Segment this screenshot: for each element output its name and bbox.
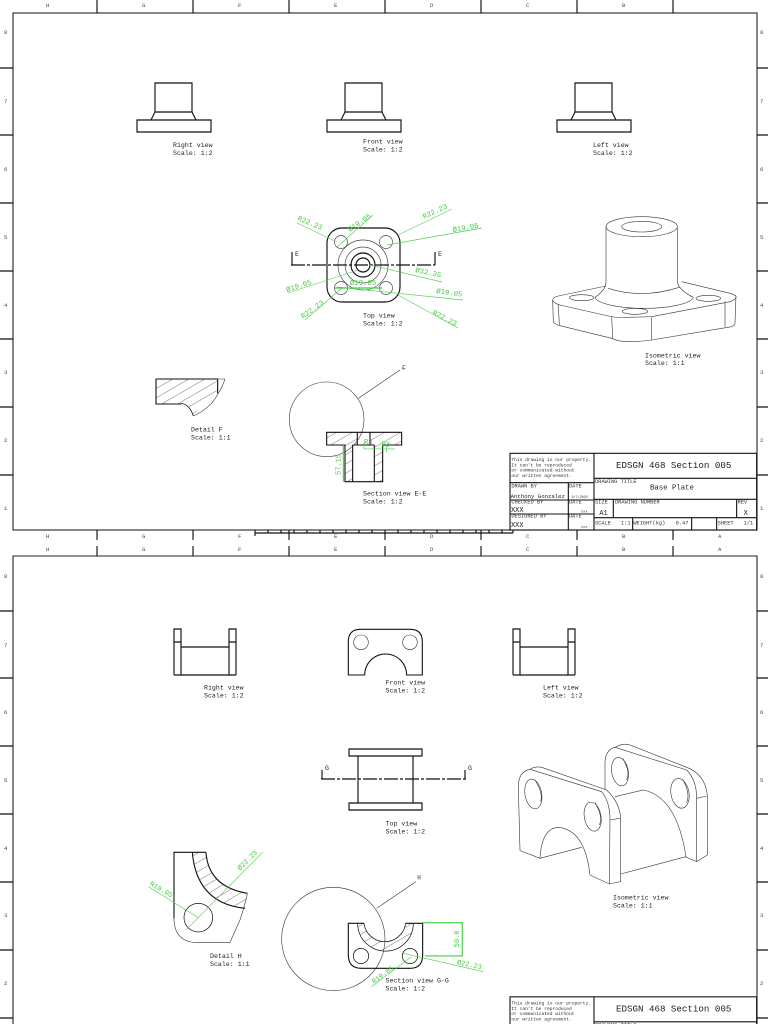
panel: sheet 1 drawing frame: 3 [4,369,7,376]
detail H: Ø22.23 [236,849,260,873]
section view E-E with detail circle: R3 [364,439,372,447]
front view of bracket [348,629,425,694]
title block: sheet 2: This drawing is our property. [511,1000,591,1006]
panel: sheet 1 drawing frame: B [622,533,626,540]
panel: sheet 2 drawing frame: D [430,546,434,553]
panel: sheet 1 drawing frame: 7 [4,98,7,105]
section view G-G with detail circle [282,875,483,992]
right view of bracket: Right view [204,684,244,692]
top view of base plate with dimensions: Ø32.35 [414,266,442,280]
detail H: Scale: 1:1 [210,961,250,968]
panel: sheet 1 drawing frame: 5 [4,234,7,241]
panel: sheet 2 drawing frame: 7 [760,642,763,649]
title block: sheet 1: This drawing is our property. [511,457,591,463]
title block: sheet 1: REV [738,500,748,506]
detail H: R19.05 [148,881,174,900]
title block: sheet 1: DATE [569,484,582,490]
panel: sheet 1 drawing frame: C [526,2,530,9]
detail F [156,379,231,442]
top view of base plate with dimensions: R22.23 [300,300,326,321]
top view of bracket: G [468,765,472,772]
panel: sheet 1 drawing frame: 1 [760,505,764,512]
panel: sheet 1 drawing frame: E [334,533,338,540]
panel: sheet 2 drawing frame: 6 [760,709,763,716]
title block: sheet 1: CHECKED BY [511,500,544,506]
panel: sheet 2 drawing frame: 4 [760,845,764,852]
top view of bracket: G [325,765,329,772]
title block: sheet 1: 9/7/2020 [572,495,588,499]
panel: sheet 1 drawing frame: 7 [760,98,763,105]
panel: sheet 2 drawing frame: E [334,546,338,553]
title block: sheet 1: DRAWN BY [511,484,538,490]
title block: sheet 1: our written agreement. [511,473,572,479]
title block: sheet 1: SHEET [718,520,734,526]
right view of bracket: Scale: 1:2 [204,692,244,700]
panel: sheet 2 drawing frame: 8 [4,573,7,580]
section view E-E with detail circle [289,365,426,506]
title block: sheet 2: EDSGN 468 Section 005 [616,1003,731,1014]
panel: sheet 1 drawing frame: H [46,533,49,540]
title block: sheet 1: or communicated without [511,468,575,474]
panel: sheet 2 drawing frame: C [526,546,530,553]
panel: sheet 1 drawing frame: F [238,533,241,540]
panel: sheet 2 drawing frame: 2 [760,980,763,987]
panel: sheet 1 drawing frame: A [718,533,722,540]
title block: sheet 1: XXX [511,522,524,530]
title block: sheet 1: DRAWING TITLE [595,479,637,485]
title block: sheet 1: xxx [581,511,588,515]
panel: sheet 1 drawing frame: 3 [760,369,763,376]
section view G-G with detail circle: Section view G-G [386,978,449,984]
title block: sheet 2 [510,997,757,1024]
top view of base plate with dimensions: Ø19.05 [436,287,463,300]
isometric view of base plate [553,217,736,367]
panel: sheet 2 drawing frame: G [142,546,146,553]
top view of bracket [321,749,472,836]
panel: sheet 2 drawing frame: 3 [4,912,7,919]
detail F: Scale: 1:1 [191,434,231,442]
section view G-G with detail circle: Ø22.23 [456,958,482,972]
title block: sheet 1: 1:1 [621,520,631,526]
section view E-E with detail circle: F [402,365,406,372]
left view of bracket [513,629,583,700]
panel: sheet 1 drawing frame: 4 [4,302,8,309]
panel: sheet 2 drawing frame: 5 [760,777,763,784]
title block: sheet 2: It can't be reproduced [511,1006,572,1012]
panel: sheet 1 drawing frame: H [46,2,49,9]
top view of bracket: Scale: 1:2 [386,828,425,836]
top view of base plate with dimensions: Scale: 1:2 [363,320,403,328]
panel: sheet 1 drawing frame: 6 [4,166,7,173]
panel: sheet 2 drawing frame: 3 [760,912,763,919]
top view of base plate with dimensions [285,203,482,329]
panel: sheet 1 drawing frame: E [334,2,338,9]
title block: sheet 2: or communicated without [511,1011,575,1017]
panel: sheet 2 drawing frame: 7 [4,642,7,649]
panel: sheet 1 drawing frame: 8 [4,29,7,36]
top view of base plate with dimensions: R22.23 [296,215,323,233]
top view of base plate with dimensions: Ø19.05 [452,222,479,235]
detail H: Detail H [210,953,242,960]
isometric view of bracket: Isometric view [613,894,668,902]
panel: sheet 1 drawing frame: C [526,533,530,540]
panel: sheet 2 drawing frame: H [46,546,49,553]
top view of bracket: Top view [386,820,417,828]
title block: sheet 1 [510,453,765,530]
title block: sheet 1: Base Plate [650,485,694,493]
top view of base plate with dimensions: Ø19.05 [350,279,376,288]
title block: sheet 1: DATE [569,500,582,506]
right view of base plate: Right view [173,142,213,149]
top view of base plate with dimensions: E [295,251,299,258]
panel: sheet 2 drawing frame: 2 [4,980,7,987]
panel: sheet 2 drawing frame: F [238,546,241,553]
panel: sheet 1 drawing frame: 2 [760,437,763,444]
title block: sheet 1: EDSGN 468 Section 005 [616,460,731,471]
panel: sheet 2 drawing frame: 4 [4,845,8,852]
title block: sheet 1: DRAWING NUMBER [615,500,661,506]
isometric view of bracket [518,744,707,910]
top view of base plate with dimensions: E [438,251,442,258]
right view of base plate: Scale: 1:2 [173,150,213,157]
panel: sheet 2 drawing frame: B [622,546,626,553]
title block: sheet 1: 0.47 [676,520,688,526]
top view of base plate with dimensions: Ø19.05 [285,278,313,295]
title block: sheet 1: It can't be reproduced [511,462,572,468]
panel: sheet 1 drawing frame: D [430,2,434,9]
top view of base plate with dimensions: R22.23 [431,310,458,329]
left view of bracket: Left view [543,684,579,692]
front view of bracket: Front view [386,680,425,686]
isometric view of base plate: Scale: 1:1 [645,360,685,367]
left view of base plate [557,83,633,157]
left view of base plate: Scale: 1:2 [593,150,633,157]
title block: sheet 1: Anthony Gonzalez [511,493,565,500]
panel: sheet 2 drawing frame: 8 [760,573,763,580]
detail H [148,849,263,968]
panel: sheet 1 drawing frame [0,0,768,540]
panel: sheet 1 drawing frame: 6 [760,166,763,173]
right view of base plate [137,83,213,157]
panel: sheet 1 drawing frame: F [238,2,241,9]
panel: sheet 1 drawing frame: G [142,533,146,540]
left view of bracket: Scale: 1:2 [543,692,583,700]
title block: sheet 1: A1 [599,510,608,518]
panel: sheet 1 drawing frame: 2 [4,437,7,444]
section view G-G with detail circle: H [417,875,421,882]
panel: sheet 1 drawing frame: D [430,533,434,540]
panel: sheet 1 drawing frame: 4 [760,302,764,309]
title block: sheet 1: XXX [511,507,524,515]
right view of bracket [174,629,244,700]
section view G-G with detail circle: R19.05 [371,965,396,986]
section view E-E with detail circle: Section view E-E [363,490,426,498]
title block: sheet 1: SCALE [595,520,611,526]
isometric view of bracket: Scale: 1:1 [613,902,653,910]
front view of base plate: Scale: 1:2 [363,146,403,154]
section view E-E with detail circle: Scale: 1:2 [363,498,403,506]
title block: sheet 1: X [744,510,749,518]
left view of base plate: Left view [593,142,629,149]
scale ruler [255,530,513,536]
top view of base plate with dimensions: Ø19.05 [347,212,373,234]
title block: sheet 1: DESIGNED BY [511,514,547,520]
front view of base plate [327,83,403,154]
title block: sheet 1: SIZE [595,500,608,506]
section view G-G with detail circle: 50.8 [454,931,462,947]
front view of base plate: Front view [363,138,403,146]
front view of bracket: Scale: 1:2 [386,688,425,694]
title block: sheet 1: WEIGHT(kg) [633,520,665,526]
panel: sheet 2 drawing frame: 6 [4,709,7,716]
panel: sheet 1 drawing frame: 1 [4,505,8,512]
isometric view of base plate: Isometric view [645,352,700,360]
title block: sheet 1: 1/1 [744,520,753,526]
section view E-E with detail circle: R3 [382,442,390,450]
title block: sheet 1: xxx [581,526,588,530]
title block: sheet 2: our written agreement. [511,1016,572,1022]
top view of base plate with dimensions: Top view [363,312,395,320]
panel: sheet 1 drawing frame: 5 [760,234,763,241]
panel: sheet 1 drawing frame: B [622,2,626,9]
panel: sheet 2 drawing frame: A [718,546,722,553]
panel: sheet 2 drawing frame: 5 [4,777,7,784]
detail F: Detail F [191,426,223,434]
title block: sheet 1: DATE [569,514,582,520]
section view E-E with detail circle: 57.15 [335,454,343,475]
panel: sheet 1 drawing frame: 8 [760,29,763,36]
top view of base plate with dimensions: R22.23 [422,203,449,222]
section view G-G with detail circle: Scale: 1:2 [386,986,425,992]
panel: sheet 2 drawing frame [0,546,768,1024]
panel: sheet 1 drawing frame: G [142,2,146,9]
